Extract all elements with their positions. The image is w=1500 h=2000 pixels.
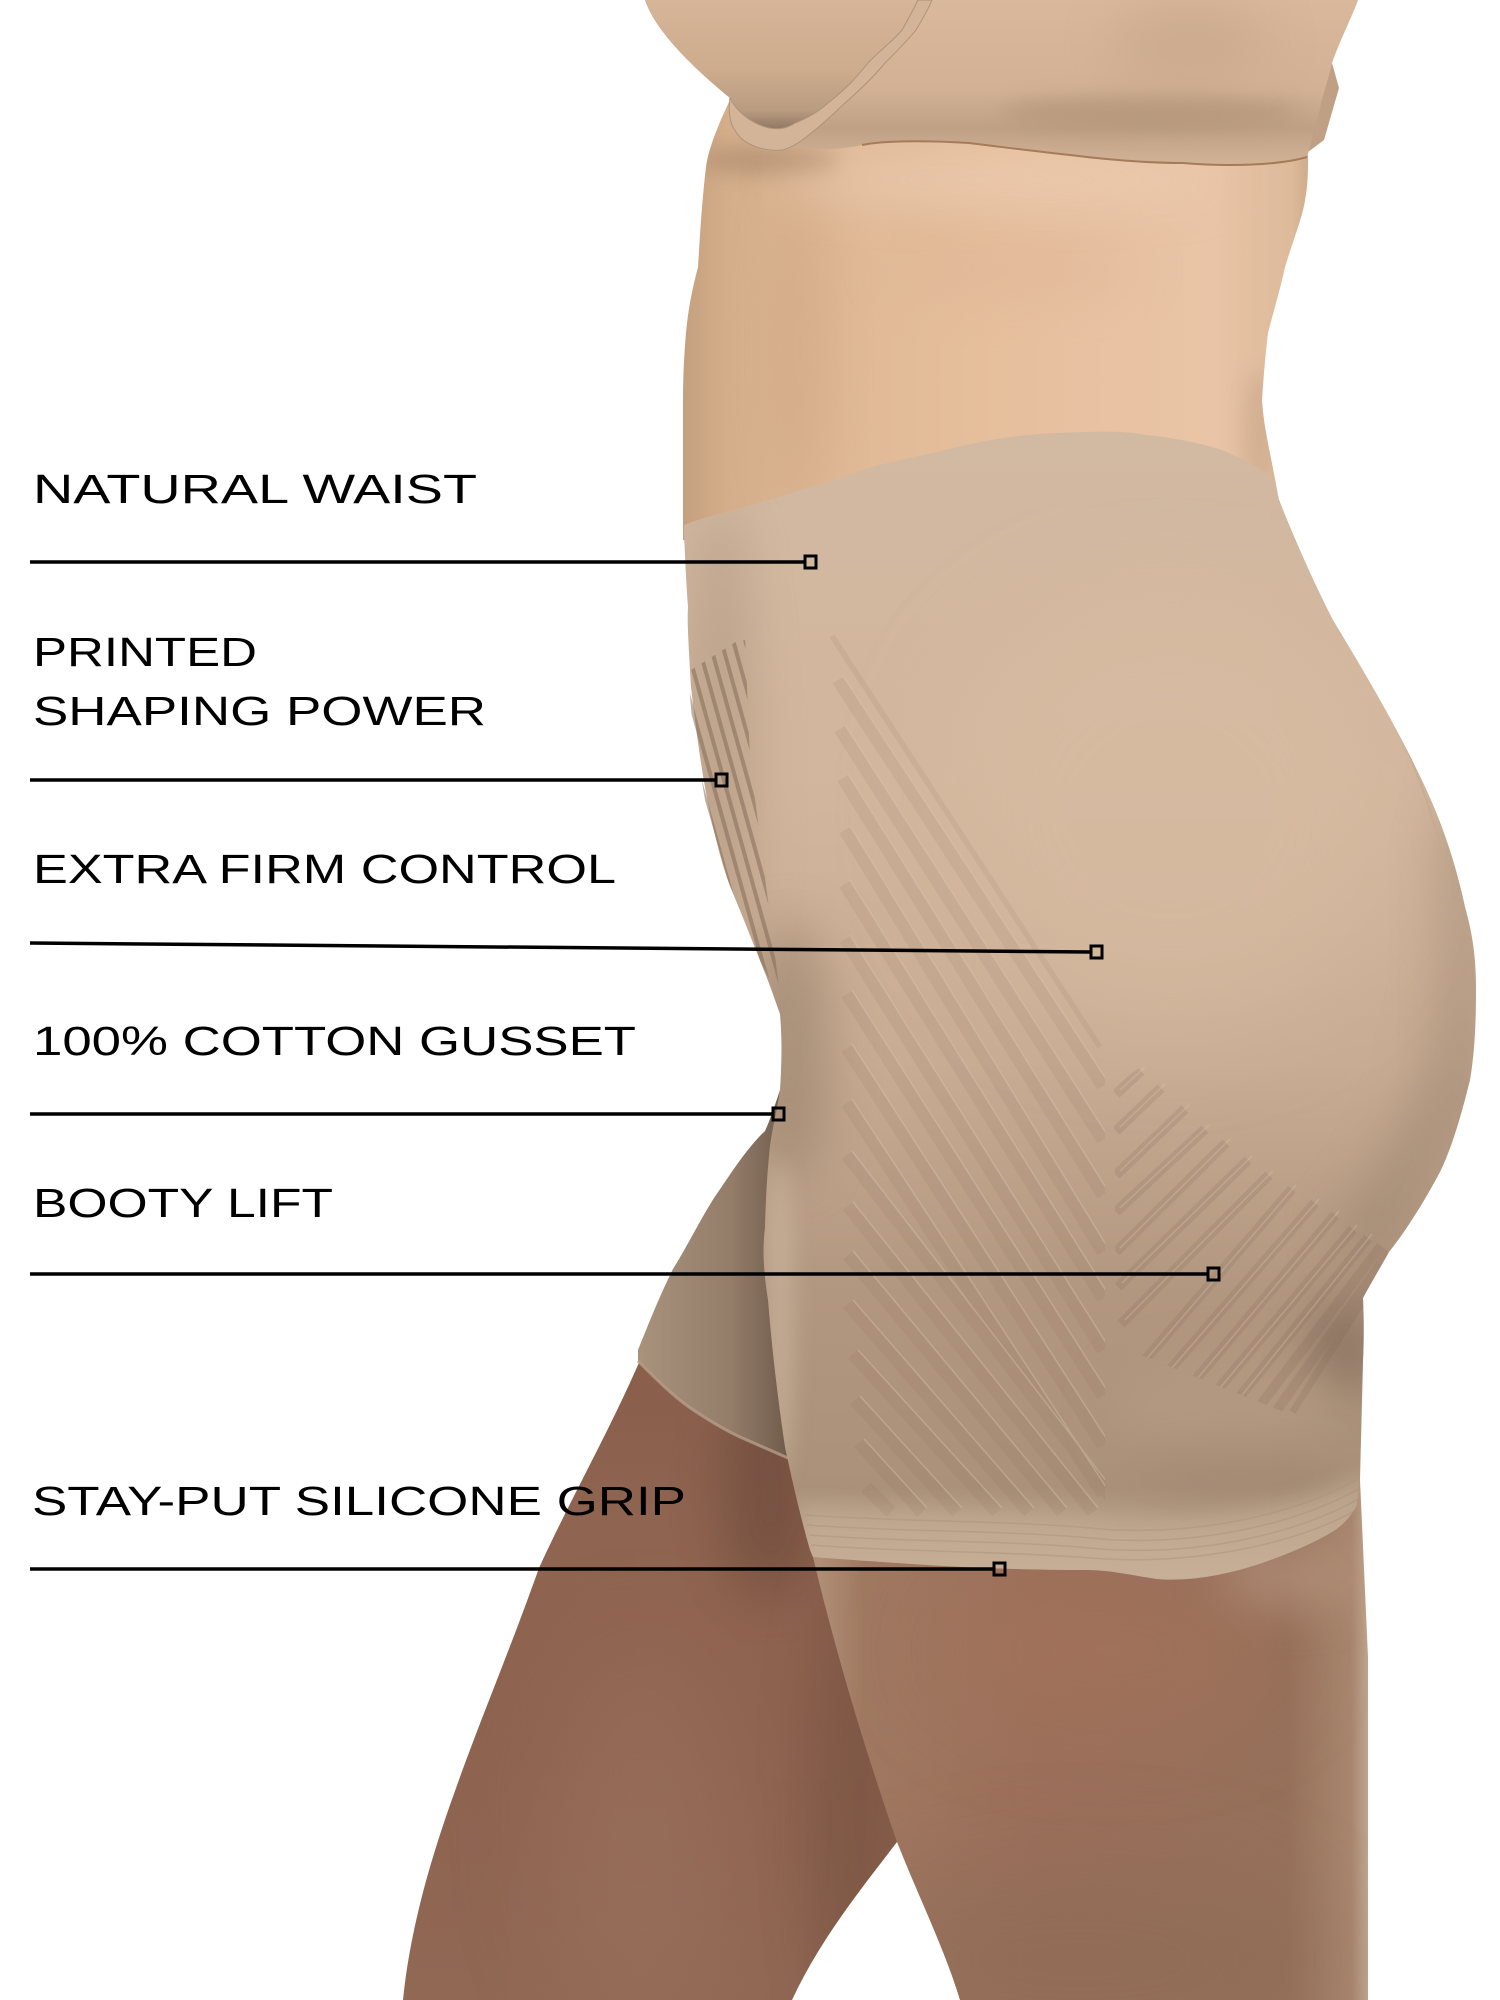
bra	[645, 0, 1358, 165]
right thigh	[813, 1480, 1368, 2000]
callout: booty lift	[30, 1180, 1219, 1280]
callout: extra firm control	[30, 846, 1102, 958]
torso skin	[683, 100, 1308, 540]
callout: stay-put silicone grip	[30, 1478, 1005, 1575]
callout: printed shaping power: SHAPING POWER	[33, 688, 486, 734]
printed stripes: back panel	[690, 640, 778, 984]
callout: natural waist	[30, 466, 816, 568]
shorts: back leg	[638, 1090, 800, 1458]
callout: 100% cotton gusset	[30, 1018, 784, 1120]
bra side tab	[1308, 63, 1339, 152]
callout: stay-put silicone grip: STAY-PUT SILICONE GRIP	[32, 1478, 686, 1524]
left thigh	[403, 1358, 910, 2000]
bra band	[645, 0, 1358, 165]
bra bottom seam	[862, 141, 1307, 165]
callout: natural waist: NATURAL WAIST	[33, 466, 477, 512]
callout: printed shaping power: PRINTED	[33, 629, 257, 675]
bra cup	[645, 0, 918, 129]
callout: booty lift: BOOTY LIFT	[33, 1180, 333, 1226]
figure: body wearing shaping shorts	[403, 0, 1490, 2000]
shorts: silicone grip hem	[802, 1478, 1360, 1580]
callout: 100% cotton gusset: 100% COTTON GUSSET	[33, 1018, 636, 1064]
printed stripes: booty lift panel	[1116, 1067, 1389, 1413]
printed stripes: front panel	[835, 630, 1127, 1512]
callout: extra firm control: EXTRA FIRM CONTROL	[33, 846, 616, 892]
callout: printed shaping power	[30, 629, 727, 786]
shorts: main panel	[684, 432, 1490, 1600]
underwire trim	[729, 0, 932, 150]
